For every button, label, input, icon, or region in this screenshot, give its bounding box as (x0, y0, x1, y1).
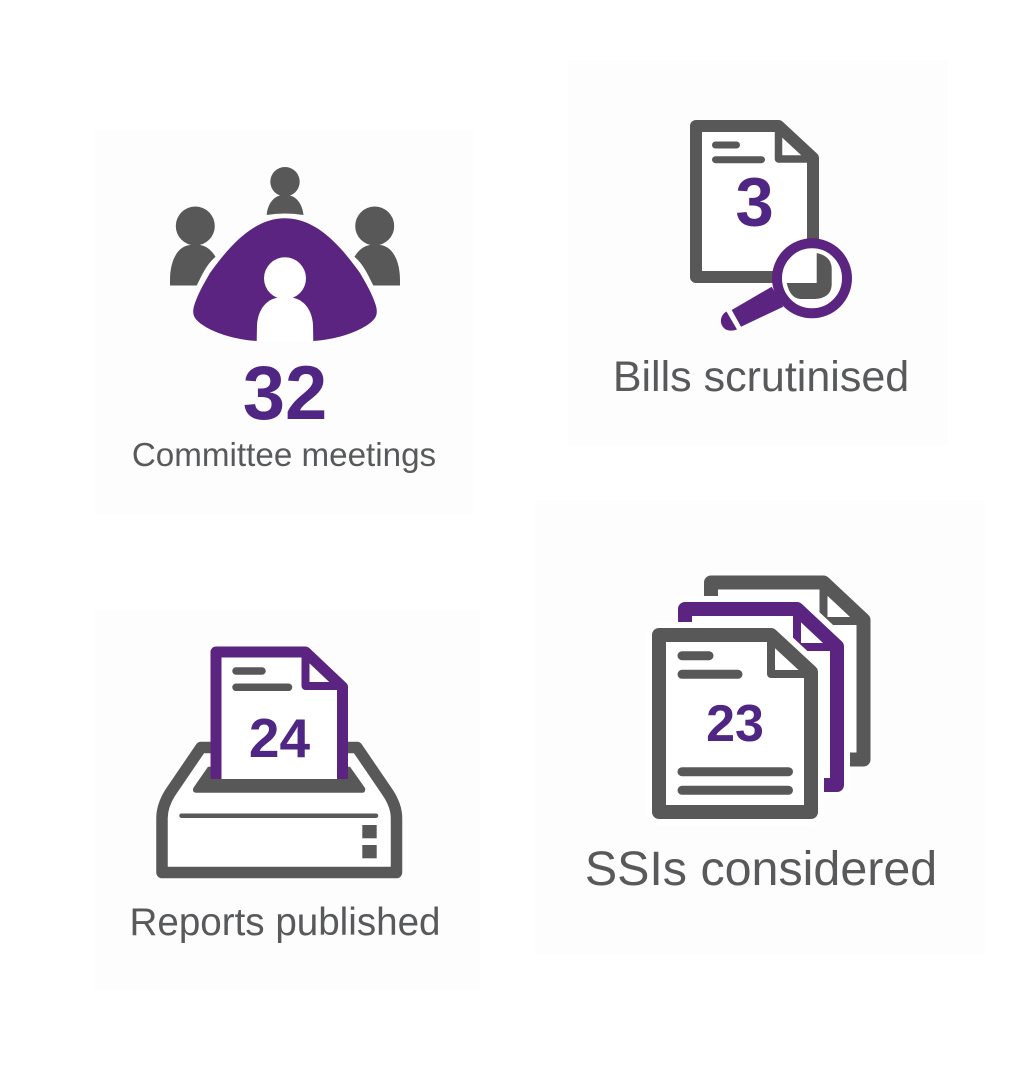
icon: stacked documents (659, 582, 864, 812)
icon: people around table (170, 167, 400, 342)
label: Reports published: Reports published (130, 901, 440, 944)
label: Committee meetings: Committee meetings (132, 437, 436, 474)
panel: reports published (130, 652, 440, 944)
label: Bills scrutinised: Bills scrutinised (613, 353, 909, 401)
number: 23: 23 (706, 695, 764, 753)
number: 3: 3 (735, 164, 774, 240)
panel: bills scrutinised (613, 126, 909, 401)
panel: SSIs considered (585, 582, 937, 896)
number: 24: 24 (249, 707, 310, 769)
icon: document with magnifier (696, 126, 847, 331)
panel: committee meetings (132, 167, 436, 474)
icon: printer tray with report (162, 652, 396, 872)
number: 32: 32 (243, 351, 327, 436)
label: SSIs considered: SSIs considered (585, 842, 937, 896)
